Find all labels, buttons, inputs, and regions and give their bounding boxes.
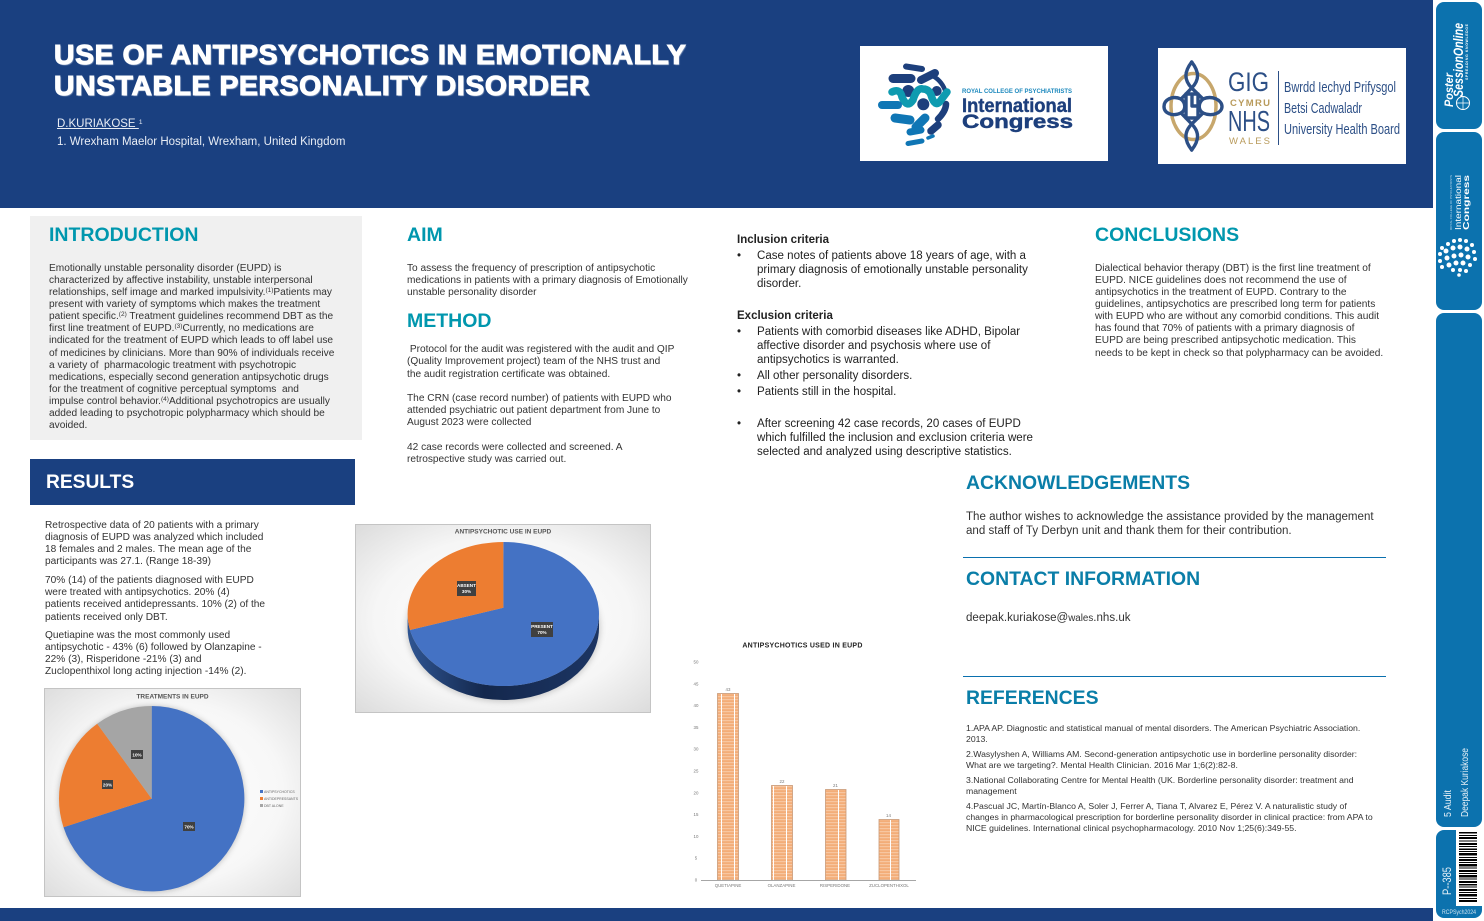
author and affiliation: 1. Wrexham Maelor Hospital, Wrexham, United Kingdom [57, 136, 345, 148]
heading: results: RESULTS [46, 472, 134, 493]
logo: GIG Cymru NHS Wales Betsi Cadwaladr: GIG [1228, 67, 1269, 97]
chart: antipsychotics used in EUPD bars [694, 642, 916, 888]
text: introduction body: for the treatment of cognitive perceptual symptoms and [49, 384, 299, 395]
text: introduction body: present with variety of symptoms which makes the treatment [49, 299, 320, 310]
text: results body: Retrospective data of 20 patients with a primary [45, 520, 259, 531]
text: method body: Protocol for the audit was registered with the audit and QIP [410, 344, 674, 355]
text: conclusions body: needs to be kept in check so that polypharmacy can be avoided. [1095, 348, 1383, 359]
text: results body: 70% (14) of the patients diagnosed with EUPD [45, 575, 254, 586]
text: conclusions body: Dialectical behavior therapy (DBT) is the first line treatment of [1095, 263, 1371, 274]
chart: antipsychotics used in EUPD bars: 35 [694, 725, 699, 730]
text: results body: patients received only DBT. [45, 612, 168, 623]
text: conclusions body: antipsychotics in the treatment of EUPD. Contrary to the [1095, 287, 1347, 298]
chart: antipsychotics used in EUPD bars: 14 [886, 813, 891, 818]
text: aim body: To assess the frequency of prescription of antipsychotic [407, 263, 655, 274]
header band [0, 0, 1433, 208]
chart: antipsychotics used in EUPD bars: 22 [780, 779, 785, 784]
text: introduction body: medications, especially second generation antipsychotic drugs [49, 372, 329, 383]
text: references list: 2013. [966, 734, 988, 744]
text: conclusions body: EUPD. NICE guidelines does not recommend the use of [1095, 275, 1347, 286]
list: exclusion criteria: • [737, 386, 741, 398]
logo: GIG Cymru NHS Wales Betsi Cadwaladr [1158, 48, 1406, 164]
chart: antipsychotics used in EUPD bars: 10 [694, 834, 699, 839]
text: aim body: unstable personality disorder [407, 287, 536, 298]
author and affiliation [57, 118, 345, 148]
text: method body: retrospective study was carried out. [407, 454, 566, 465]
text: aim body: medications in patients with a primary diagnosis of Emotionally [407, 275, 688, 286]
logo: GIG Cymru NHS Wales Betsi Cadwaladr: WALES [1229, 136, 1270, 147]
text: introduction body: first line treatment of EUPD.(3)Currently, no medications are [49, 323, 314, 334]
list: inclusion criteria: Case notes of patients above 18 years of age, with a [757, 250, 1026, 262]
chart: antipsychotics used in EUPD bars: 15 [694, 812, 699, 817]
chart: antipsychotics used in EUPD bars: RISPERIDONE [820, 883, 850, 888]
text: introduction body: a variety of pharmacologic treatment with psychotropic [49, 360, 296, 371]
text: conclusions body [1095, 263, 1383, 359]
title: UNSTABLE PERSONALITY DISORDER [54, 70, 590, 101]
heading: exclusion criteria: Exclusion criteria [737, 310, 833, 322]
list: exclusion criteria: selected and analyzed using descriptive statistics. [757, 446, 1012, 458]
chart: treatments in EUPD pie: 70% [184, 824, 194, 830]
list: exclusion criteria: which fulfilled the inclusion and exclusion criteria were [757, 432, 1033, 444]
chart: treatments in EUPD pie: DBT ALONE [264, 804, 284, 808]
chart: treatments in EUPD pie: 10% [132, 752, 142, 758]
heading: contact information: CONTACT INFORMATION [966, 568, 1200, 590]
author and affiliation: D.KURIAKOSE 1 [57, 118, 142, 130]
heading: method: METHOD [407, 310, 492, 332]
chart: antipsychotics used in EUPD bars: ZUCLOPENTHIXOL [869, 883, 909, 888]
list: inclusion criteria: • [737, 250, 741, 262]
text: method body: The CRN (case record number) of patients with EUPD who [407, 393, 671, 404]
list: exclusion criteria: antipsychotics is warranted. [757, 354, 899, 366]
chart: antipsychotics used in EUPD bars: ANTIPSYCHOTICS USED IN EUPD [742, 642, 863, 650]
text: results body: Zuclopenthixol long acting injection -14% (2). [45, 666, 246, 677]
list: exclusion criteria: • [737, 418, 741, 430]
chart: antipsychotics used in EUPD bars: QUETIAPINE [715, 883, 741, 888]
chart: antipsychotic use in EUPD 3D pie: ABSENT [457, 583, 476, 588]
text: references list: changes in pharmacological prescription for borderline personality disorder in clinical practice: from APA to [966, 812, 1373, 822]
heading: references: REFERENCES [966, 687, 1099, 709]
text: aim body [407, 263, 688, 298]
logo: GIG Cymru NHS Wales Betsi Cadwaladr: University Health Board [1284, 121, 1400, 138]
heading: acknowledgements: ACKNOWLEDGEMENTS [966, 472, 1190, 494]
text: results body: antipsychotic - 43% (6) followed by Olanzapine - [45, 642, 262, 653]
text: method body: the audit registration certificate was obtained. [407, 369, 610, 380]
chart: antipsychotics used in EUPD bars: 21 [833, 783, 838, 788]
panel: introduction [30, 216, 362, 440]
list: exclusion criteria: All other personality disorders. [757, 370, 912, 382]
text: conclusions body: EUPD are being prescribed antipsychotic medication. This [1095, 335, 1356, 346]
logo: GIG Cymru NHS Wales Betsi Cadwaladr: Betsi Cadwaladr [1284, 100, 1362, 117]
text: references list: NICE guidelines. International clinical psychopharmacology. 2010 Nov 1;25(6):349-55. [966, 822, 1297, 832]
sidebar tab: PosterSessionOnline: SessionOnline [1450, 23, 1466, 97]
text: results body: Quetiapine was the most commonly used [45, 630, 230, 641]
sidebar tab: poster number and barcode [1436, 830, 1482, 918]
logo: GIG Cymru NHS Wales Betsi Cadwaladr: NHS [1228, 106, 1270, 138]
text: introduction body: Emotionally unstable personality disorder (EUPD) is [49, 263, 281, 274]
chart: antipsychotics used in EUPD bars: 40 [694, 703, 699, 708]
text: conclusions body: guidelines, antipsychotics are prescribed long term for patients [1095, 299, 1375, 310]
chart: antipsychotics used in EUPD bars: 5 [695, 856, 698, 861]
text: introduction body: added leading to psychotropic polypharmacy which should be [49, 408, 325, 419]
logo: Royal College of Psychiatrists International Congress: International [962, 96, 1072, 117]
chart: treatments in EUPD pie [44, 688, 301, 897]
title [54, 39, 686, 101]
chart: antipsychotics used in EUPD bars: 50 [694, 660, 699, 664]
text: acknowledgements body: and staff of Ty Derbyn unit and thank them for their contribution. [966, 525, 1292, 537]
logo: GIG Cymru NHS Wales Betsi Cadwaladr: Bwrdd Iechyd Prifysgol [1284, 79, 1396, 96]
text: results body: diagnosis of EUPD was analyzed which included [45, 532, 263, 543]
sidebar tab: category and author: 5 Audit [1442, 790, 1454, 817]
text: introduction body: avoided. [49, 420, 87, 431]
sidebar tab: International Congress: International [1453, 175, 1463, 230]
chart: antipsychotics used in EUPD bars: 25 [694, 768, 699, 774]
text: acknowledgements body: The author wishes to acknowledge the assistance provided by the management [966, 511, 1374, 523]
text: references list: 1.APA AP. Diagnostic and statistical manual of mental disorders. The American Psychiatric Association. [966, 723, 1360, 733]
list: inclusion criteria: disorder. [757, 278, 801, 290]
text: results body: 22% (3), Risperidone -21% (3) and [45, 654, 201, 665]
chart: treatments in EUPD pie: TREATMENTS IN EUPD [136, 694, 209, 700]
list: exclusion criteria: • [737, 326, 741, 338]
text: references list: 4.Pascual JC, Martín-Blanco A, Soler J, Ferrer A, Tiana T, Alvarez E, Pérez V. A naturalistic study of [966, 800, 1347, 810]
chart: antipsychotics used in EUPD bars: 43 [726, 687, 731, 692]
heading: introduction: INTRODUCTION [49, 224, 198, 246]
text: contact email: deepak.kuriakose@wales.nhs.uk [966, 612, 1131, 624]
chart: antipsychotics used in EUPD bars: OLANZAPINE [768, 883, 795, 888]
list: exclusion criteria [737, 326, 1033, 458]
logo: Royal College of Psychiatrists International Congress [860, 46, 1108, 161]
text: introduction body [49, 263, 334, 431]
chart: antipsychotic use in EUPD 3D pie: 70% [537, 630, 547, 635]
title: USE OF ANTIPSYCHOTICS IN EMOTIONALLY [54, 39, 686, 70]
heading: conclusions: CONCLUSIONS [1095, 224, 1239, 246]
chart: antipsychotics used in EUPD bars: 45 [694, 681, 699, 686]
list: inclusion criteria: primary diagnosis of emotionally unstable personality [757, 264, 1028, 276]
sidebar tab: PosterSessionOnline: SPREADING KNOWLEDGE [1465, 23, 1469, 80]
text: method body [407, 344, 674, 465]
chart: antipsychotic use in EUPD 3D pie [355, 524, 651, 713]
sidebar tab: International Congress [1436, 132, 1482, 310]
heading: inclusion criteria: Inclusion criteria [737, 234, 829, 246]
text: references list: What are we targeting?. Mental Health Clinician. 2016 Mar 1;6(2):82-8. [966, 760, 1238, 770]
chart: antipsychotic use in EUPD 3D pie: 30% [462, 589, 471, 594]
list: exclusion criteria: Patients with comorbid diseases like ADHD, Bipolar [757, 326, 1020, 338]
text: conclusions body: with EUPD who are without any comorbid conditions. This audit [1095, 311, 1379, 322]
text: introduction body: impulse control behavior.(4)Additional psychotropics are usually [49, 396, 330, 407]
list: exclusion criteria: affective disorder and psychosis where use of [757, 340, 990, 352]
sidebar tab: International Congress: Congress [1461, 175, 1471, 230]
heading: aim: AIM [407, 224, 443, 246]
list: inclusion criteria [737, 250, 1028, 290]
text: introduction body: patient specific.(2) Treatment guidelines recommend DBT as the [49, 311, 333, 322]
chart: treatments in EUPD pie: ANTIDEPRESSANTS [264, 797, 299, 801]
text: method body: attended psychiatric out patient department from June to [407, 405, 660, 416]
text: introduction body: of medicines by clinicians. More than 90% of individuals receive [49, 348, 334, 359]
text: conclusions body: has found that 70% of patients with a primary diagnosis of [1095, 323, 1354, 334]
sidebar tab: category and author: Deepak Kuriakose [1459, 748, 1471, 817]
chart: antipsychotics used in EUPD bars: 0 [695, 878, 698, 882]
sidebar tab: PosterSessionOnline [1436, 2, 1482, 129]
text: results body: were treated with antipsychotics. 20% (4) [45, 587, 230, 598]
text: results body [45, 520, 265, 677]
logo: Royal College of Psychiatrists International Congress: Congress [962, 112, 1073, 133]
sidebar tab: poster number and barcode: P--385 [1442, 867, 1454, 895]
text: results body: patients received antidepressants. 10% (2) of the [45, 599, 265, 610]
sidebar tab: category and author [1436, 313, 1482, 827]
sidebar tab: International Congress: ROYAL COLLEGE OF PSYCHIATRISTS [1449, 175, 1453, 230]
sidebar tab: PosterSessionOnline: Poster [1442, 72, 1456, 107]
text: references list [966, 723, 1373, 832]
text: method body: 42 case records were collected and screened. A [407, 442, 623, 453]
chart: treatments in EUPD pie: 20% [103, 782, 112, 788]
chart: antipsychotics used in EUPD bars: 20 [694, 790, 699, 795]
text: references list: 3.National Collaborating Centre for Mental Health (UK. Borderline personality disorder: treatment and [966, 775, 1354, 785]
chart: treatments in EUPD pie: ANTIPSYCHOTICS [264, 790, 295, 794]
logo: GIG Cymru NHS Wales Betsi Cadwaladr: CYMRU [1230, 98, 1270, 109]
list: exclusion criteria: Patients still in the hospital. [757, 386, 896, 398]
text: introduction body: characterized by affective instability, unstable interpersonal [49, 275, 313, 286]
text: references list: management [966, 786, 1017, 796]
text: results body: 18 females and 2 males. The mean age of the [45, 544, 251, 555]
logo: Royal College of Psychiatrists International Congress: ROYAL COLLEGE OF PSYCHIATRISTS [962, 88, 1073, 95]
list: exclusion criteria: After screening 42 case records, 20 cases of EUPD [757, 418, 1021, 430]
text: introduction body: indicated for the treatment of EUPD which leads to off label use [49, 335, 333, 346]
chart: antipsychotics used in EUPD bars: 30 [694, 747, 699, 752]
text: acknowledgements body [966, 511, 1374, 537]
footer band [0, 908, 1433, 921]
heading: results [30, 459, 355, 505]
text: method body: (Quality Improvement project) team of the NHS trust and [407, 356, 660, 367]
text: introduction body: relationships, self image and marked impulsivity.(1)Patients may [49, 287, 332, 298]
text: results body: participants was 27.1. (Range 18-39) [45, 556, 211, 567]
chart: antipsychotic use in EUPD 3D pie: PRESENT [531, 624, 553, 629]
sidebar tab: poster number and barcode: RCPSych2024 [1442, 910, 1477, 916]
text: method body: August 2023 were collected [407, 417, 531, 428]
chart: antipsychotic use in EUPD 3D pie: ANTIPSYCHOTIC USE IN EUPD [455, 528, 552, 536]
text: references list: 2.Wasylyshen A, Williams AM. Second-generation antipsychotic use in borderline personality disorder: [966, 749, 1357, 759]
list: exclusion criteria: • [737, 370, 741, 382]
